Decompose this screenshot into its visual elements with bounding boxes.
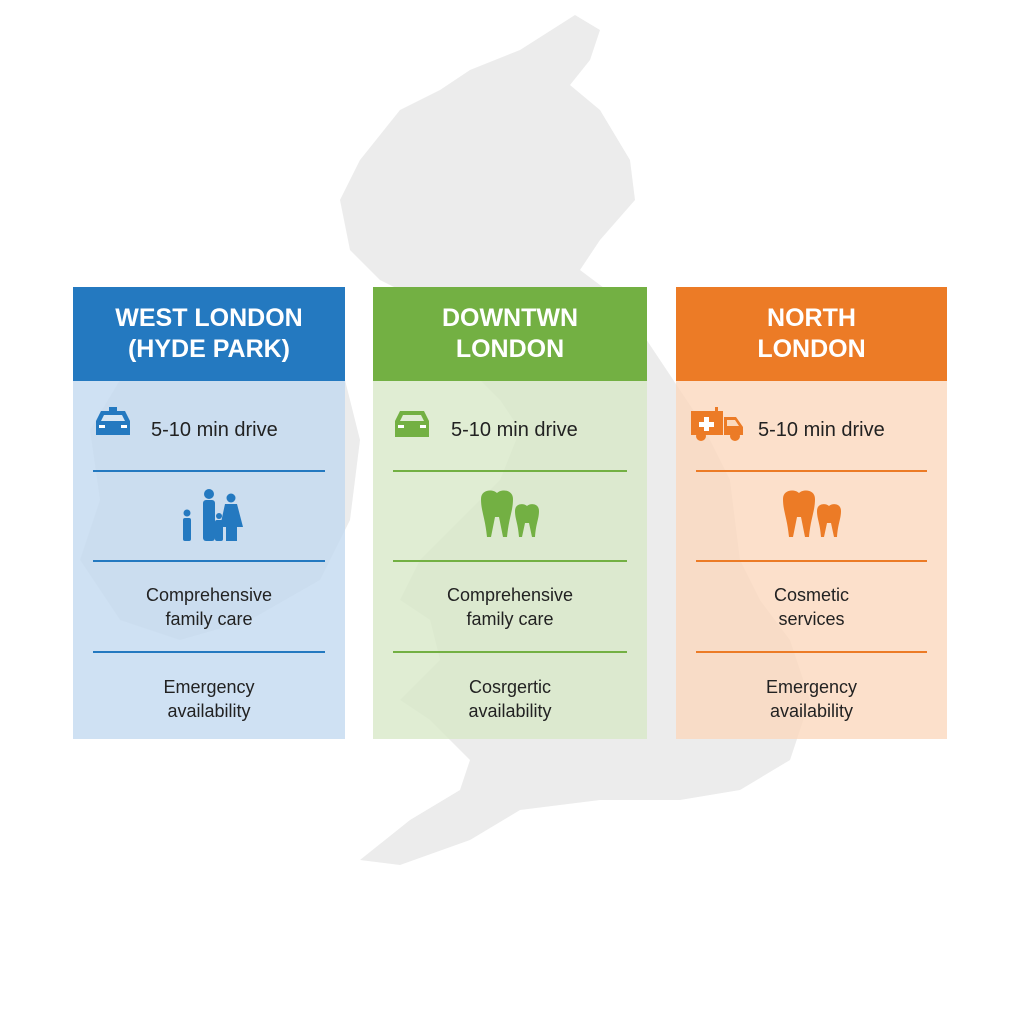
- text: cosrgertic: [468, 677, 552, 721]
- icon: teeth: [783, 490, 841, 537]
- text: emergency: Emergency: [766, 677, 857, 697]
- icon: taxi: [96, 407, 130, 435]
- text: family care: [146, 585, 272, 629]
- panel: downtown london: [373, 287, 647, 739]
- text: emergency: [163, 677, 255, 721]
- text: family care: Comprehensive: [447, 585, 573, 605]
- icon: car: [395, 411, 429, 437]
- text: drive: 5-10 min drive: [451, 419, 578, 441]
- text: drive: 5-10 min drive: [758, 419, 885, 441]
- text: emergency: [766, 677, 857, 721]
- text: cosrgertic: Cosrgertic: [469, 677, 551, 697]
- heading: downtown: [373, 287, 647, 381]
- text: emergency: Emergency: [163, 677, 255, 697]
- text: emergency: availability: [167, 701, 251, 721]
- text: drive: 5-10 min drive: [151, 419, 278, 441]
- heading: downtown: DOWNTWN: [442, 304, 578, 332]
- heading: north: NORTH: [767, 304, 856, 332]
- icon: ambulance: [691, 407, 743, 441]
- icon: teeth: [481, 490, 539, 537]
- heading: north: [676, 287, 947, 381]
- heading: west london: [73, 287, 345, 381]
- panel: north london: [676, 287, 947, 739]
- text: family care: Comprehensive: [146, 585, 272, 605]
- text: family care: [447, 585, 573, 629]
- text: family care: family care: [165, 609, 253, 629]
- text: cosmetic: services: [778, 609, 844, 629]
- heading: downtown: LONDON: [456, 335, 564, 363]
- heading: north: LONDON: [757, 335, 866, 363]
- heading: west london: (HYDE PARK): [128, 335, 290, 363]
- text: cosmetic: [774, 585, 849, 629]
- text: cosrgertic: availability: [468, 701, 552, 721]
- panel: west london: [73, 287, 345, 739]
- text: emergency: availability: [770, 701, 853, 721]
- text: family care: family care: [466, 609, 554, 629]
- text: cosmetic: Cosmetic: [774, 585, 849, 605]
- heading: west london: WEST LONDON: [115, 304, 303, 332]
- icon: family: [183, 489, 243, 541]
